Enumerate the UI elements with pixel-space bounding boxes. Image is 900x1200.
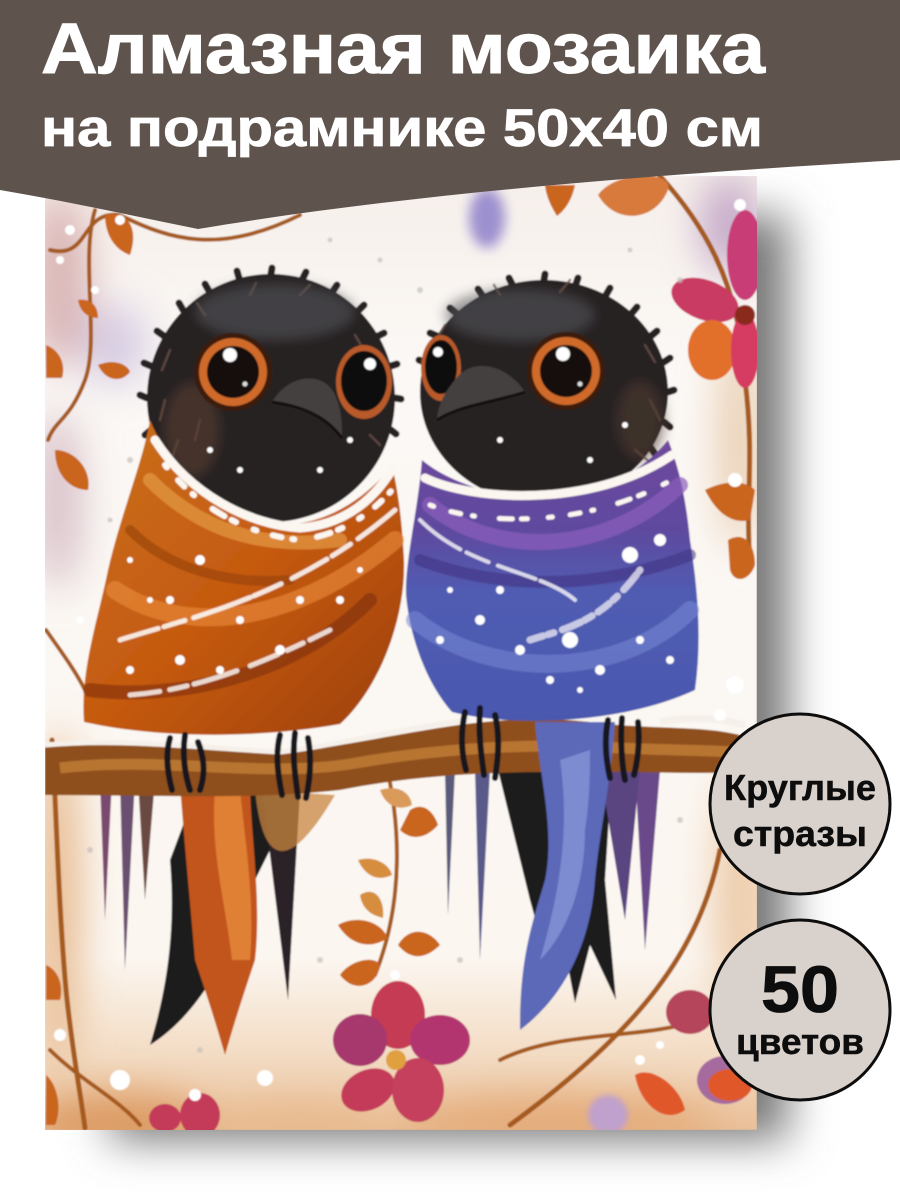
grey paint specks [87,238,683,1053]
canvas shadow [110,215,788,1140]
flower: bottom centre [333,981,470,1122]
branch [45,718,745,796]
right bird tail feathers [445,770,660,1003]
painted background blobs [30,175,768,1155]
right bird purple and blue scarf [406,440,699,721]
right bird claws [462,708,639,780]
badge: 50 colours: 50 [761,952,839,1026]
left bird small eye [336,345,392,419]
left bird head [140,268,401,522]
left bird beak [272,379,342,438]
badge: 50 colours [710,920,890,1100]
right bird [406,274,699,780]
badge: 50 colours: цветов [736,1021,864,1062]
header banner [0,0,900,229]
badge: round rhinestones: стразы [733,813,867,854]
right bird scarf tail [520,722,615,1030]
purple brush mark [469,188,505,248]
left bird head feather texture [160,283,380,458]
vines [46,176,750,1128]
left bird [83,268,404,798]
badge: round rhinestones: Круглые [724,767,876,808]
subtitle: на подрамнике 50х40 см [41,99,763,158]
title: Алмазная мозаика [41,10,766,89]
flower: bottom right [588,990,753,1135]
flower: top right [670,209,757,389]
right bird small eye [421,335,461,401]
left bird orange scarf [83,420,404,735]
right bird large eye [527,332,605,410]
right bird head feather texture [436,280,660,462]
right bird head [419,274,674,504]
autumn leaves [46,176,755,1125]
left bird tail and feathers [100,780,335,1055]
flower: bottom left [148,1092,221,1130]
snow flecks [54,199,746,1101]
left bird claws [167,733,310,798]
right bird beak [437,366,525,420]
scarf fold highlights [90,440,395,695]
panel: painting of two birds [30,175,768,1155]
badge: round rhinestones [710,714,890,894]
scarf fold highlights [415,455,690,664]
left bird large eye [194,333,272,411]
